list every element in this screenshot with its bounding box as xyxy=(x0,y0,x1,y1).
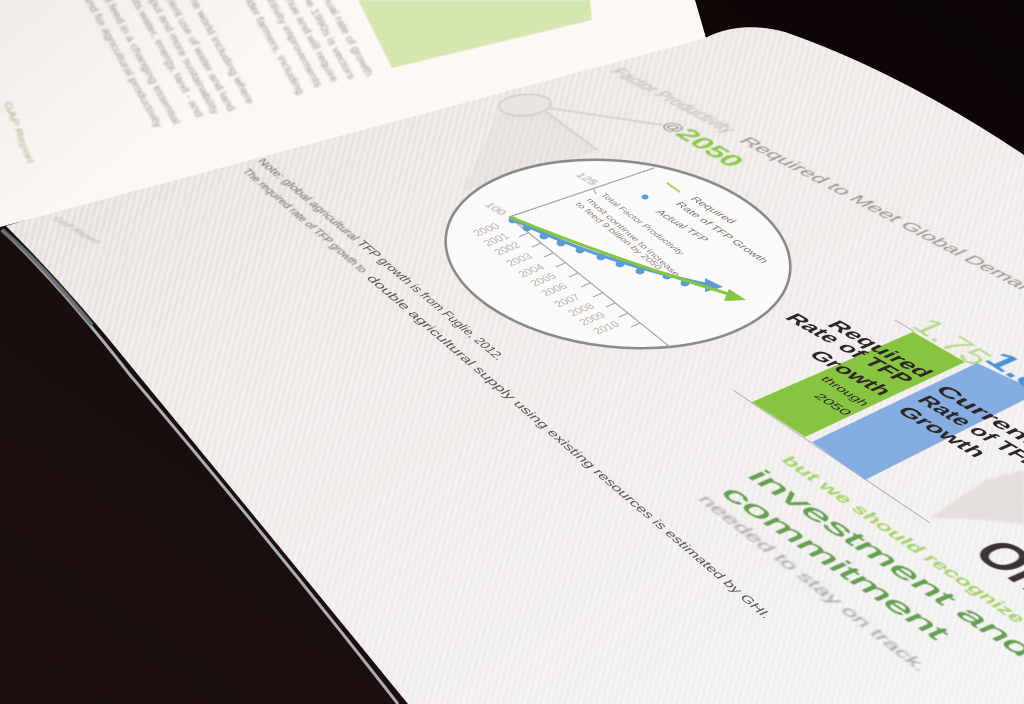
callout: investment and commitment: commitment xyxy=(714,483,958,643)
year labels: 2007 xyxy=(552,293,584,309)
year labels: 2000 xyxy=(471,222,503,238)
chart note: to feed 9 billion by 2050 xyxy=(573,201,665,271)
label: required rate of TFP growth: through xyxy=(817,375,873,408)
chart legend: Required xyxy=(687,196,738,225)
callout: investment and commitment: but we should recognize xyxy=(776,454,1024,625)
year labels: 2009 xyxy=(577,311,609,327)
callout: investment and commitment xyxy=(714,454,1024,660)
year labels: 2001 xyxy=(481,232,513,248)
callout: investment and commitment: investment and xyxy=(741,466,1024,660)
chart legend xyxy=(642,183,770,265)
footnotes: TFP growth is from Fuglie, 2012. xyxy=(353,239,508,362)
axis value labels: 100 xyxy=(481,201,509,217)
footnotes xyxy=(239,157,775,620)
label: required rate of TFP growth: 2050 xyxy=(810,392,856,417)
chart note xyxy=(573,192,688,278)
left page running footer: GAP Report xyxy=(1,100,36,167)
year labels: 2003 xyxy=(504,252,536,268)
bar: current rate xyxy=(812,348,1024,480)
year labels xyxy=(471,222,623,336)
footnotes: double agricultural supply using existing resources is estimated by GHI. xyxy=(363,274,775,620)
actual TFP blue dots and arrow xyxy=(508,217,723,292)
panel: growth rate bars xyxy=(733,311,1024,523)
footnotes: Note: global agricultural xyxy=(254,157,361,242)
title: TFP required: Factor Productivity xyxy=(606,66,741,135)
title: TFP required xyxy=(606,66,1024,301)
label: current rate of TFP growth: Rate of TFP xyxy=(911,393,1024,471)
chart axes xyxy=(509,168,670,347)
right page running header: GAP Report xyxy=(50,216,103,245)
footnotes: The required rate of TFP growth to xyxy=(239,167,369,274)
subtitle: @ 2050: 2050 xyxy=(669,126,750,170)
axis value labels xyxy=(481,171,600,217)
subtitle: @ 2050 xyxy=(657,119,750,170)
label: current rate of TFP growth xyxy=(891,383,1024,471)
green callout box on left page xyxy=(358,0,592,68)
label: required rate of TFP growth: Growth xyxy=(803,348,897,398)
panel: left booklet page xyxy=(0,0,706,227)
panel: magnified line chart xyxy=(436,143,800,365)
left page body text xyxy=(39,0,375,130)
axis value labels: 125 xyxy=(572,171,600,187)
label: required rate of TFP growth: Rate of TFP xyxy=(779,311,918,387)
title: TFP required: Required to Meet Global Demand xyxy=(734,135,1024,301)
year labels: 2002 xyxy=(492,241,524,257)
label: current rate of TFP growth: Growth xyxy=(891,404,991,460)
text: needed to stay on track. xyxy=(693,493,933,674)
year labels: 2005 xyxy=(528,272,560,288)
year labels: 2004 xyxy=(516,263,548,279)
year labels: 2010 xyxy=(591,320,623,336)
year labels: 2006 xyxy=(539,282,571,298)
small chart thumbnail with zoom cone xyxy=(462,93,663,192)
chart note: Total Factor Productivity xyxy=(598,192,688,256)
label: required rate of TFP growth xyxy=(779,311,938,417)
chart legend: Actual TFP xyxy=(652,209,711,244)
subtitle: @ 2050: @ xyxy=(657,119,689,135)
year labels: 2008 xyxy=(566,302,598,318)
required rate green line and arrow xyxy=(510,217,746,301)
bar: required rate xyxy=(752,311,1001,437)
label: required rate of TFP growth: Required xyxy=(821,318,938,380)
chart note: must continue to increase xyxy=(584,197,683,278)
gray world map fragment xyxy=(930,470,1024,525)
chart legend: Rate of TFP Growth xyxy=(672,201,770,265)
label: current rate of TFP growth: Current xyxy=(929,383,1024,448)
value 1.75: 1.75 xyxy=(903,314,1001,370)
